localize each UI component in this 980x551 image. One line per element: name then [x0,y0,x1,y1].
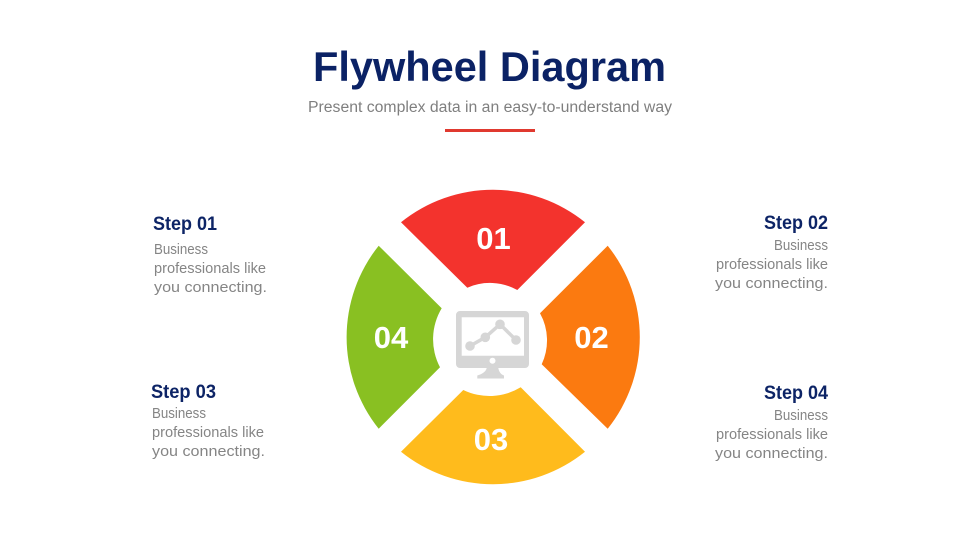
text block: step 02: Business [774,237,828,254]
text block: step 01: professionals like [154,260,266,277]
segment 02: orange: 02 [574,320,609,355]
text block: step 02: you connecting. [715,275,828,292]
subtitle: Present complex data in an easy-to-understand way [308,99,672,116]
icon: monitor with line chart [456,311,529,378]
segment 01: red: 01 [476,221,511,256]
segment 04: green [347,246,442,429]
text block: step 04: Business [774,407,828,424]
segment 01: red [401,190,585,290]
title underline accent [445,129,535,132]
segment 02: orange [540,246,640,429]
text block: step 03: Step 03 [151,382,216,403]
text block: step 04: you connecting. [715,445,828,462]
text block: step 03 [151,382,265,460]
text block: step 01: Step 01 [153,214,217,235]
text block: step 02: professionals like [716,256,828,273]
text block: step 01: you connecting. [154,279,267,296]
text block: step 04: Step 04 [764,383,828,404]
text block: step 01: Business [154,241,208,258]
text block: step 03: Business [152,405,206,422]
segment 03: yellow [401,387,585,484]
text block: step 04: professionals like [716,426,828,443]
text block: step 03: you connecting. [152,443,265,460]
segment 04: green: 04 [374,320,409,355]
segment 03: yellow: 03 [474,422,508,457]
text block: step 01 [153,214,267,296]
text block: step 04 [715,383,828,462]
text block: step 02 [715,213,828,292]
text block: step 03: professionals like [152,424,264,441]
text block: step 02: Step 02 [764,213,828,234]
title: Flywheel Diagram [313,43,666,90]
flywheel diagram [347,190,640,484]
